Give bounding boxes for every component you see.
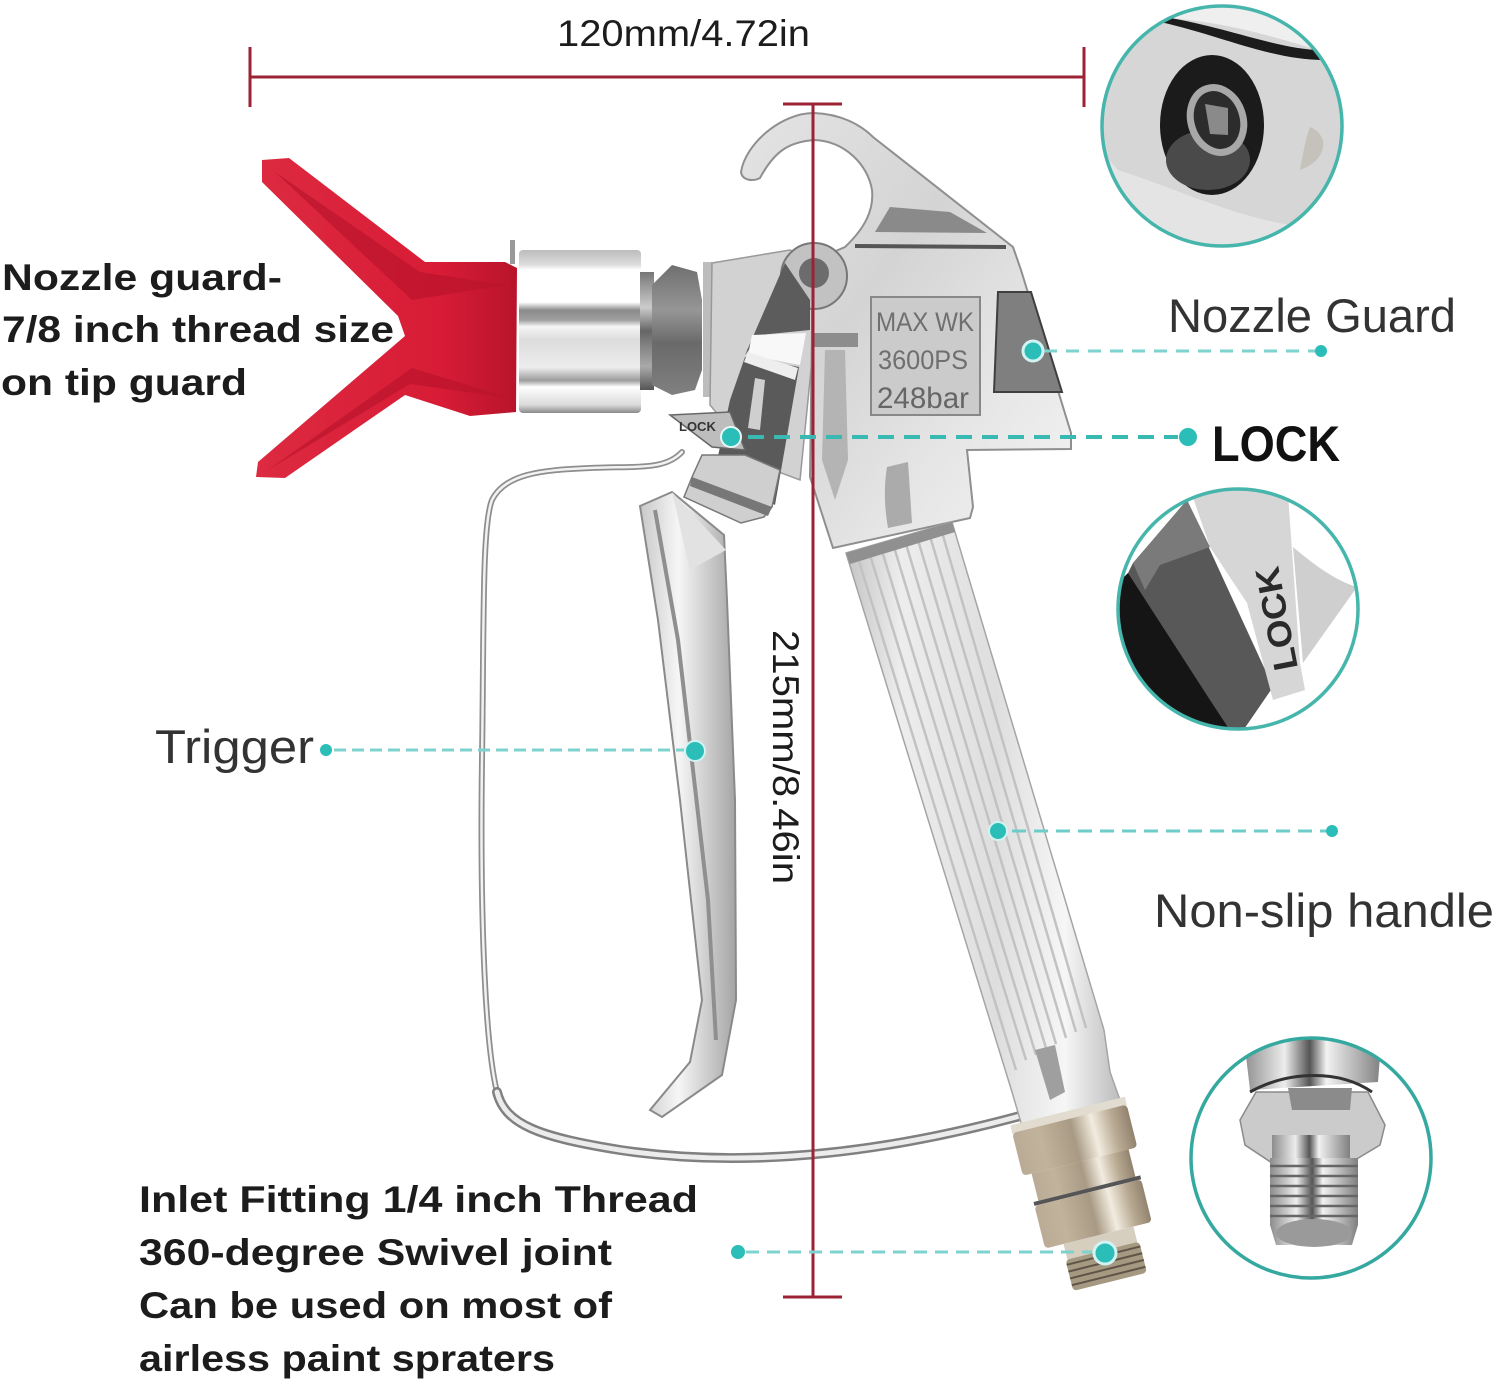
gun body with hook	[741, 113, 1071, 548]
washer	[703, 262, 712, 397]
body shading	[885, 462, 912, 528]
trigger	[640, 492, 736, 1117]
rear window	[994, 292, 1062, 392]
hex lock nut	[652, 265, 702, 395]
inset: lock lever detail	[1116, 487, 1360, 731]
dimension: height	[783, 104, 842, 1297]
label: Nozzle Guard: Nozzle Guard	[1168, 289, 1456, 342]
rating plate: 3600PS	[878, 345, 968, 375]
thin pin behind nut	[510, 240, 515, 264]
callout: nozzle guard thread text: Nozzle guard-	[2, 257, 282, 298]
body front strip	[822, 350, 848, 500]
leader: handle	[989, 822, 1338, 840]
label: Trigger: Trigger	[155, 720, 314, 773]
red nozzle guard tip	[256, 158, 517, 478]
inset: inlet fitting detail	[1190, 1030, 1431, 1285]
swivel nut	[519, 250, 641, 413]
spray gun	[256, 113, 1167, 1296]
hook shadow	[875, 207, 987, 233]
brass swivel fitting	[1010, 1097, 1167, 1296]
rating plate: 248bar	[877, 382, 969, 415]
callout: inlet fitting text: Can be used on most of	[139, 1285, 613, 1326]
height label: 215mm/8.46in	[765, 630, 806, 884]
rating plate: MAX WK	[876, 307, 974, 337]
body pin	[814, 333, 858, 347]
label: LOCK: LOCK	[1212, 416, 1340, 472]
gun front plate	[710, 250, 812, 480]
label: Non-slip handle: Non-slip handle	[1154, 884, 1494, 937]
callout: inlet fitting text: 360-degree Swivel joint	[139, 1232, 612, 1273]
leader: lock	[721, 427, 1197, 447]
callout: inlet fitting text: airless paint spraters	[139, 1338, 555, 1379]
rating plate	[871, 297, 980, 415]
callout: inlet fitting text	[139, 1179, 698, 1379]
leader: trigger	[320, 741, 705, 761]
lock lever: LOCK	[679, 419, 716, 434]
ribbed handle	[846, 522, 1120, 1126]
callout: nozzle guard thread text	[1, 257, 394, 403]
threaded collar	[640, 272, 654, 390]
body top line	[855, 246, 1006, 247]
callout: nozzle guard thread text: 7/8 inch thread size	[2, 309, 394, 350]
dimension: width	[250, 47, 1084, 107]
callout: nozzle guard thread text: on tip guard	[1, 362, 247, 403]
width label: 120mm/4.72in	[557, 13, 810, 54]
inset: lock lever detail: LOCK	[1248, 563, 1306, 674]
inset: nozzle guard detail	[1100, 0, 1350, 260]
lock lever	[670, 263, 810, 523]
leader: inlet	[731, 1242, 1116, 1264]
callout: inlet fitting text: Inlet Fitting 1/4 inch Thread	[139, 1179, 698, 1220]
trigger guard wire	[482, 452, 1020, 1158]
pivot screw	[781, 243, 847, 309]
leader: nozzle guard	[1023, 341, 1327, 361]
